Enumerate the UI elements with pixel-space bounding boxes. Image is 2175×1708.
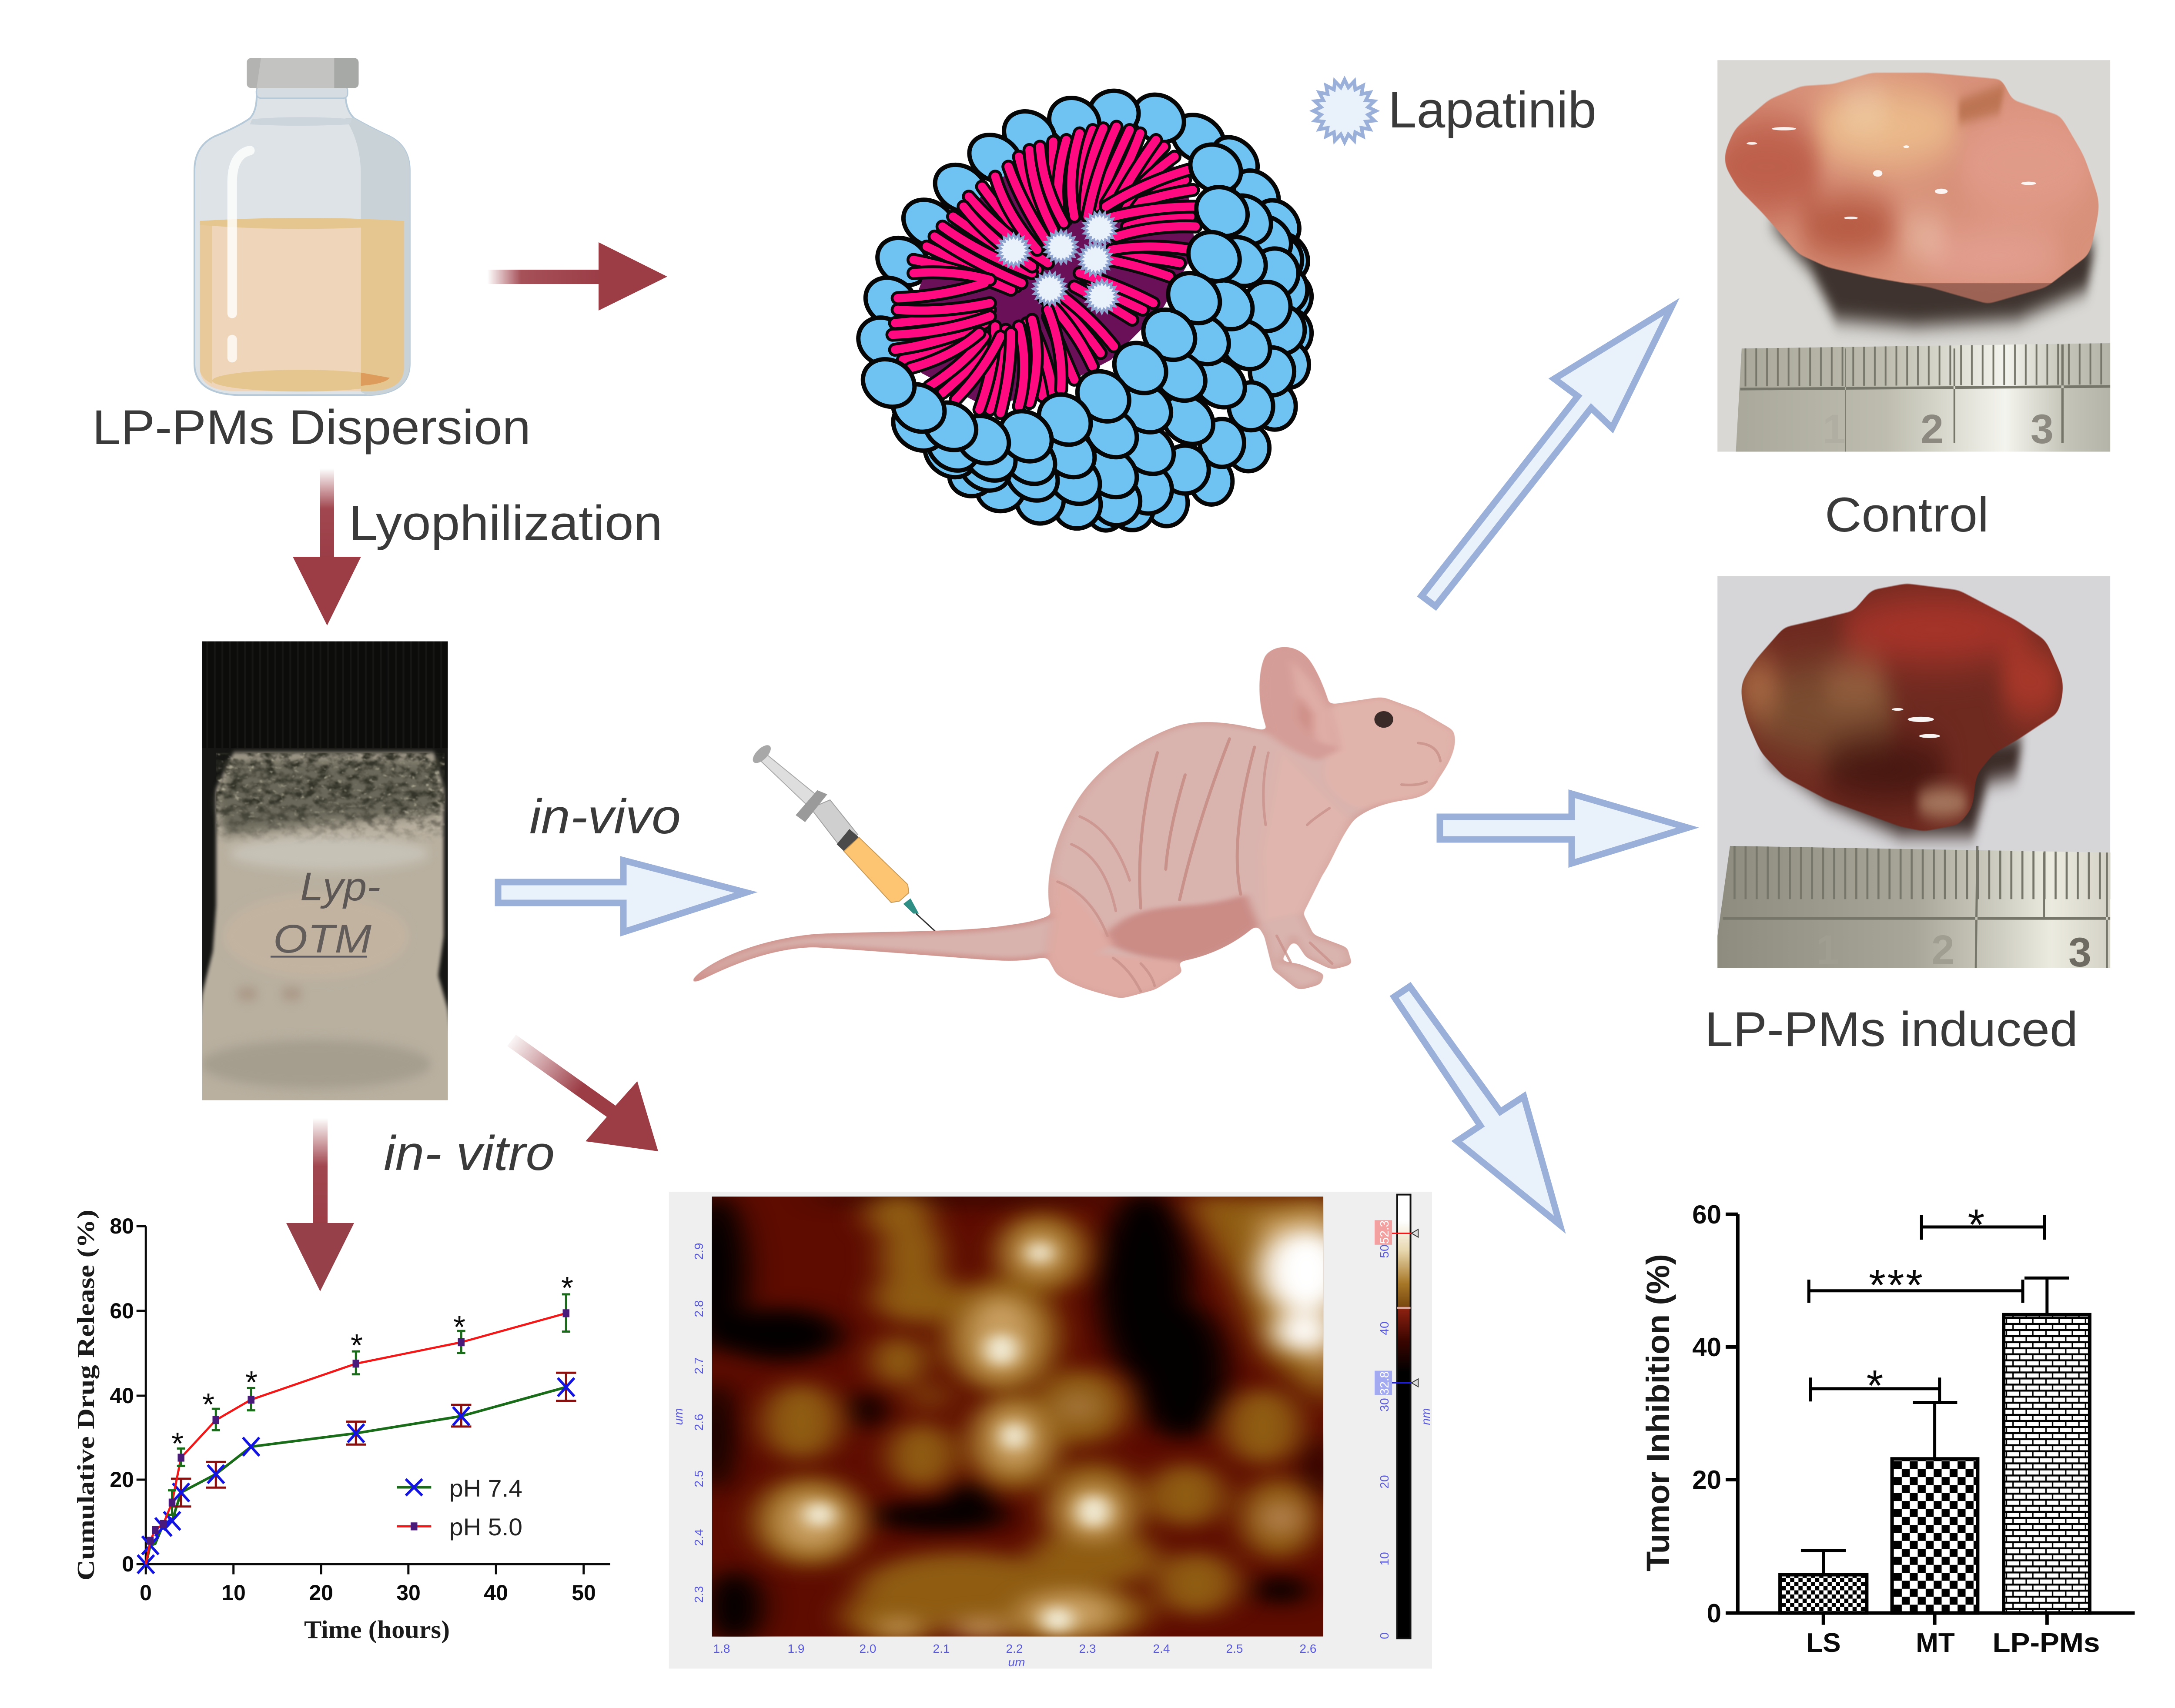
legend marks — [397, 1479, 431, 1531]
AFM micrograph panel: 2.5 — [692, 1471, 706, 1487]
AFM micrograph panel: 40 — [1378, 1321, 1391, 1335]
line chart: drug release: 40 — [110, 1384, 134, 1408]
icon: syringe — [749, 744, 948, 943]
AFM micrograph panel: 30 — [1378, 1398, 1391, 1412]
bar chart: tumor inhibition: * — [1968, 1200, 1984, 1249]
line chart: drug release — [73, 1210, 610, 1644]
photo: lyophilized powder jar: OTM — [273, 917, 371, 961]
series: pH 5.0 — [146, 1294, 570, 1564]
line chart: drug release: 20 — [110, 1467, 134, 1492]
photo: lyophilized powder jar: Lyp- — [300, 865, 381, 909]
AFM micrograph panel: 2.4 — [692, 1529, 706, 1546]
drug molecules in core — [997, 212, 1118, 313]
AFM micrograph panel: 0 — [1378, 1632, 1391, 1639]
photo: lyophilized powder jar — [202, 641, 448, 1100]
bar chart: tumor inhibition — [1640, 1200, 2135, 1658]
hydrophobic tails — [893, 127, 1195, 413]
photo: control tumor: 1 — [1823, 406, 1846, 452]
line chart: drug release: 50 — [572, 1581, 596, 1605]
line chart: drug release: 0 — [140, 1581, 152, 1605]
line chart: drug release: * — [245, 1365, 258, 1400]
AFM micrograph panel: 2.4 — [1153, 1642, 1170, 1655]
line chart: drug release: 80 — [110, 1214, 134, 1238]
bar chart: tumor inhibition: Tumor Inhibition (%) — [1640, 1254, 1676, 1571]
bar chart: tumor inhibition: * — [1867, 1361, 1883, 1410]
error bars — [1801, 1278, 2069, 1575]
line chart: drug release: * — [171, 1427, 184, 1461]
photo: LP-PMs induced tumor: 3 — [2068, 929, 2091, 976]
AFM micrograph panel: 32.8 — [1378, 1371, 1391, 1395]
line chart: drug release: 0 — [122, 1552, 134, 1576]
AFM micrograph panel: 2.7 — [692, 1357, 706, 1374]
front outer rows of heads — [887, 134, 1313, 531]
bar chart: tumor inhibition: 60 — [1692, 1200, 1721, 1229]
line chart: drug release: Cumulative Drug Release (%) — [73, 1210, 100, 1581]
AFM micrograph panel: 2.9 — [692, 1243, 706, 1260]
label: in-vivo: in-vivo — [529, 789, 681, 844]
bar chart: tumor inhibition: MT — [1916, 1628, 1955, 1658]
line chart: drug release: 10 — [221, 1581, 246, 1605]
line chart: drug release: 20 — [309, 1581, 333, 1605]
AFM micrograph panel: 2.5 — [1226, 1642, 1243, 1655]
AFM micrograph panel: nm — [1419, 1408, 1432, 1425]
AFM micrograph panel: 10 — [1378, 1552, 1391, 1566]
line chart: drug release: pH 5.0 — [449, 1513, 522, 1541]
line chart: drug release: Time (hours) — [304, 1615, 450, 1644]
AFM micrograph panel: 2.0 — [860, 1642, 876, 1655]
AFM micrograph panel: 20 — [1378, 1475, 1391, 1489]
label: in- vitro: in- vitro — [384, 1126, 555, 1180]
arrow: mouse to control tumor — [1422, 307, 1672, 606]
arrow: in-vitro diagonal — [507, 1035, 658, 1151]
photo: control tumor — [1711, 60, 2110, 452]
AFM micrograph panel: um — [672, 1408, 685, 1425]
inner rim of heads — [857, 142, 1252, 466]
line chart: drug release: * — [453, 1310, 465, 1345]
line chart: drug release: * — [351, 1328, 363, 1363]
arrow: vial to micelle — [487, 242, 667, 311]
photo: control tumor: 2 — [1921, 406, 1944, 452]
AFM micrograph panel: 2.3 — [692, 1586, 706, 1603]
AFM micrograph panel: 50 — [1378, 1244, 1391, 1258]
bar chart: tumor inhibition: 0 — [1707, 1599, 1721, 1628]
label: Control: Control — [1825, 488, 1989, 542]
label: LP-PMs Dispersion: LP-PMs Dispersion — [92, 400, 531, 455]
arrow: mouse to tumor inhibition chart — [1394, 986, 1560, 1225]
line chart: drug release: * — [561, 1271, 573, 1306]
photo: LP-PMs induced tumor: 2 — [1931, 927, 1954, 973]
label: LP-PMs induced: LP-PMs induced — [1705, 1002, 2078, 1056]
arrow: in-vivo — [498, 860, 746, 932]
bars — [1780, 1315, 2090, 1613]
bar chart: tumor inhibition: *** — [1869, 1261, 1923, 1310]
illustration: nude mouse — [693, 647, 1454, 997]
AFM micrograph panel: 2.2 — [1006, 1642, 1023, 1655]
line chart: drug release: * — [202, 1387, 214, 1422]
legend label: Lapatinib: Lapatinib — [1388, 81, 1596, 139]
icon: vial with LP-PMs dispersion — [194, 58, 410, 395]
significance brackets — [1809, 1215, 2044, 1401]
legend icon: lapatinib star — [1313, 80, 1376, 142]
AFM micrograph panel: 2.6 — [1300, 1642, 1316, 1655]
arrow: lyophilization — [293, 468, 361, 625]
AFM micrograph panel: 2.6 — [692, 1414, 706, 1431]
arrow: in-vitro down — [286, 1118, 354, 1291]
AFM micrograph panel: 52.3 — [1378, 1220, 1391, 1244]
AFM micrograph panel: 2.3 — [1079, 1642, 1096, 1655]
line chart: drug release: 60 — [110, 1299, 134, 1323]
bar chart: tumor inhibition: LS — [1806, 1628, 1841, 1658]
series: pH 7.4 — [137, 1373, 576, 1574]
AFM micrograph panel — [669, 1191, 1432, 1669]
AFM micrograph panel: 1.9 — [788, 1642, 804, 1655]
photo: LP-PMs induced tumor: 1 — [1816, 927, 1839, 973]
AFM micrograph panel: 2.1 — [933, 1642, 950, 1655]
AFM micrograph panel: 1.8 — [713, 1642, 730, 1655]
arrow: mouse to LP-PMs tumor — [1440, 794, 1688, 863]
photo: control tumor: 3 — [2031, 406, 2054, 452]
line chart: drug release: pH 7.4 — [449, 1474, 522, 1502]
core — [916, 144, 1195, 406]
line chart: drug release: 30 — [396, 1581, 421, 1605]
bar chart: tumor inhibition: LP-PMs — [1992, 1628, 2100, 1658]
back rim of blue heads — [853, 91, 1232, 368]
AFM micrograph panel: 2.8 — [692, 1300, 706, 1317]
bar chart: tumor inhibition: 20 — [1692, 1465, 1721, 1494]
AFM micrograph panel: um — [1008, 1655, 1025, 1669]
photo: LP-PMs induced tumor — [1717, 576, 2110, 976]
line chart: drug release: 40 — [484, 1581, 508, 1605]
micelle illustration — [853, 91, 1313, 531]
label: Lyophilization: Lyophilization — [349, 496, 663, 550]
bar chart: tumor inhibition: 40 — [1692, 1333, 1721, 1362]
